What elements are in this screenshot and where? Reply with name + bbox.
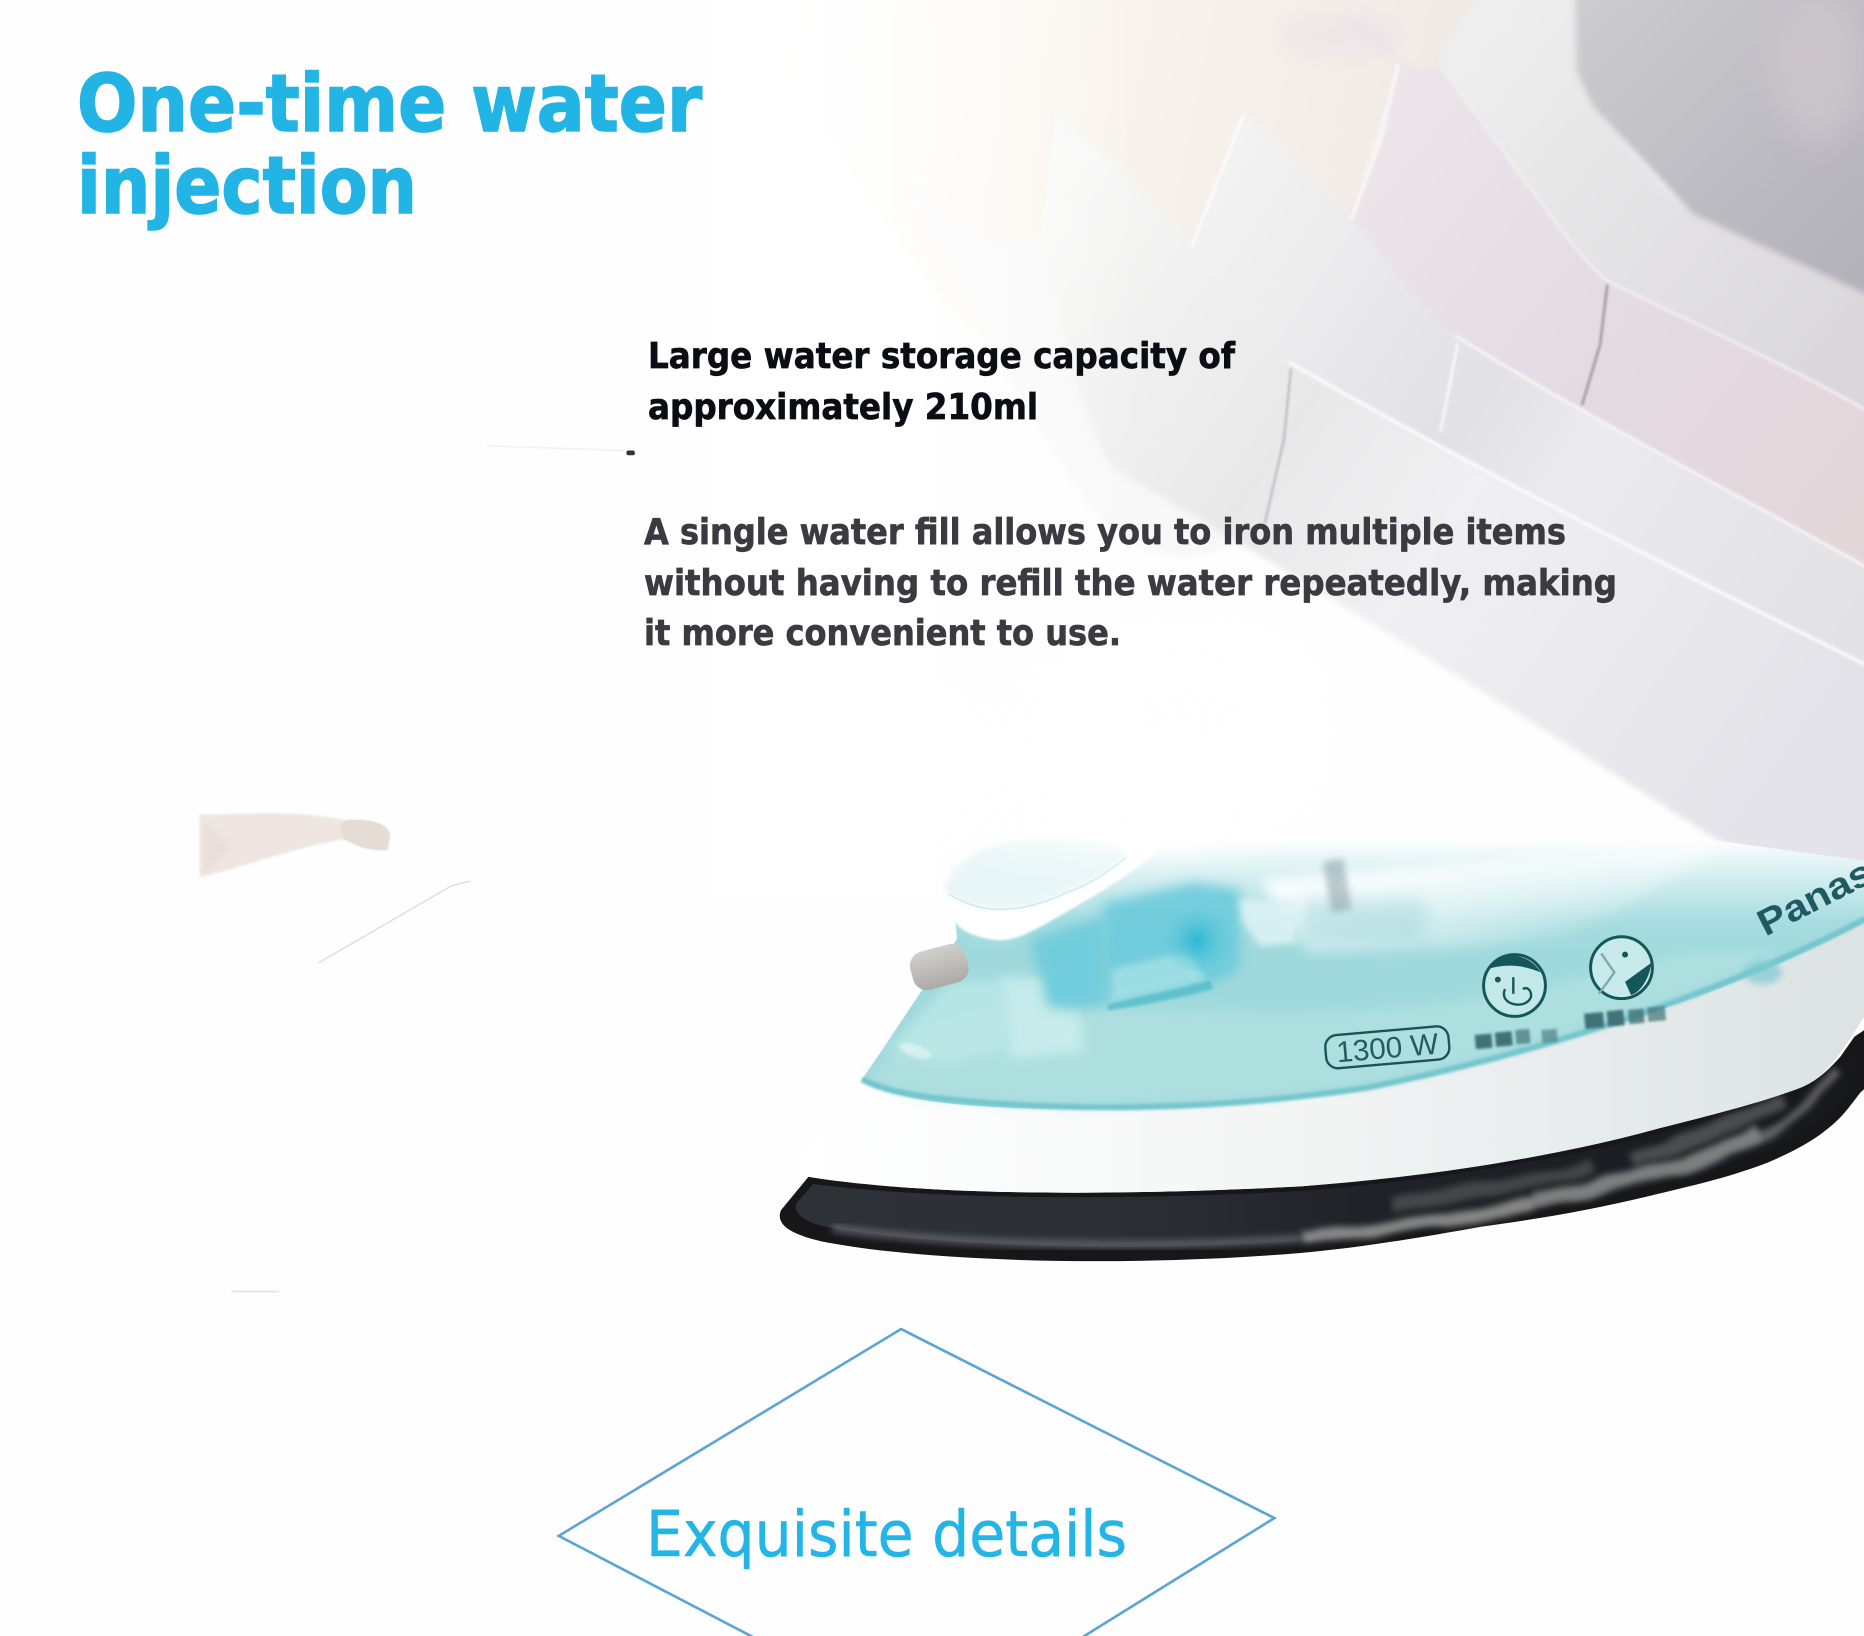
body text: without having to refill the water repeatedly, making xyxy=(644,563,1617,604)
brand name: Panas xyxy=(1750,851,1864,944)
blurred printed captions xyxy=(1475,1006,1666,1049)
title: One-time water xyxy=(77,58,702,150)
subheading: Large water storage capacity of xyxy=(648,336,1235,377)
icon: steam function xyxy=(1484,955,1545,1016)
body text: it more convenient to use. xyxy=(644,613,1121,654)
tank lower zone xyxy=(868,951,1783,1103)
body text xyxy=(644,512,1617,654)
saturated water window xyxy=(1103,882,1240,1001)
upper highlight xyxy=(1260,842,1726,951)
garment creases xyxy=(1041,65,1864,668)
title: injection xyxy=(77,140,417,232)
section heading: Exquisite details xyxy=(646,1498,1127,1571)
soleplate xyxy=(780,1025,1864,1261)
faded garment remnant xyxy=(200,446,635,1292)
power rating badge: 1300 W xyxy=(1335,1028,1440,1069)
steam iron xyxy=(780,618,1864,1261)
subheading: approximately 210ml xyxy=(648,387,1038,428)
diamond outline xyxy=(559,1329,1274,1636)
white shell xyxy=(798,903,1864,1193)
hanging shirts xyxy=(713,0,1864,896)
subheading xyxy=(648,336,1235,428)
icon: spray function xyxy=(1591,937,1652,999)
body text: A single water fill allows you to iron multiple items xyxy=(644,512,1566,553)
teal water tank xyxy=(862,832,1864,1109)
title xyxy=(77,58,702,232)
dial xyxy=(945,824,1177,940)
steam cloud xyxy=(903,618,1331,840)
side knob xyxy=(907,941,972,993)
